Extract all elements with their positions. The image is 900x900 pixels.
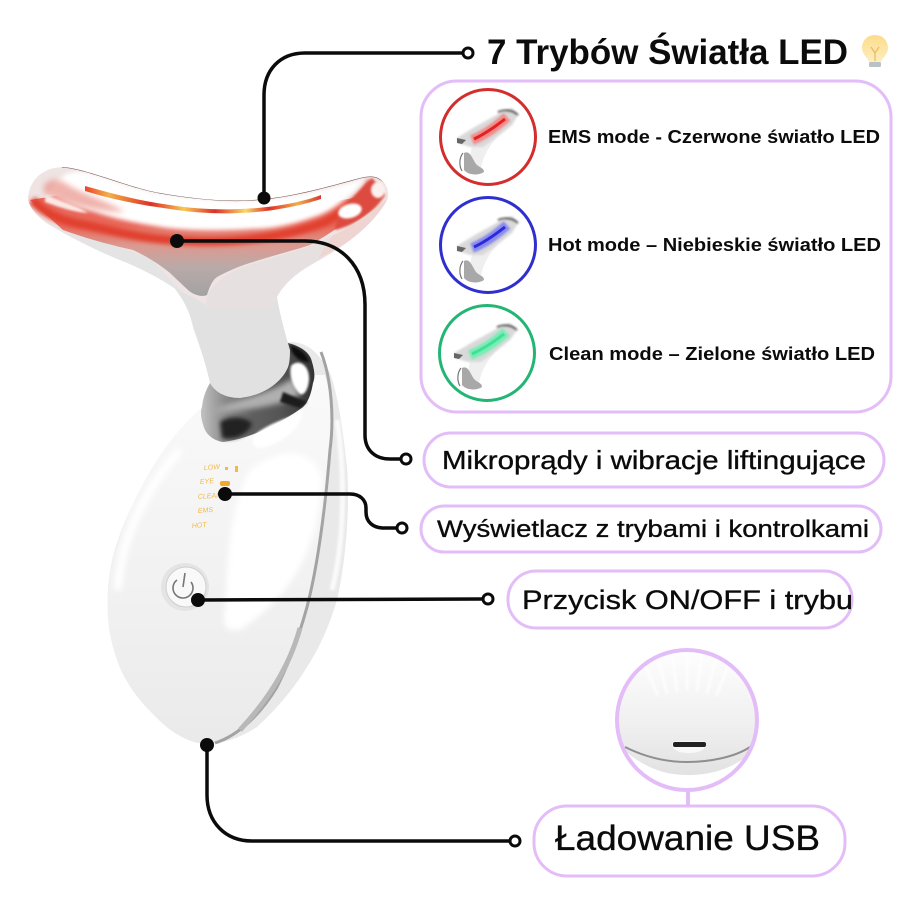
device head (28, 167, 388, 306)
icon: blue mode device (440, 198, 536, 292)
device body (108, 342, 348, 744)
display indicators: EYE (200, 478, 214, 486)
line: power button (198, 599, 482, 600)
display indicators: LOW (204, 464, 221, 472)
line: LED modes (264, 53, 462, 198)
right lower rim (318, 198, 388, 258)
label: Clean mode: Clean mode – Zielone światło LED (549, 344, 875, 364)
display indicators: CLEAN (198, 492, 222, 501)
line: microcurrents (177, 241, 400, 459)
label: EMS mode: EMS mode - Czerwone światło LED (548, 127, 880, 147)
collar shading (212, 378, 300, 412)
LED strip (85, 186, 321, 213)
line: USB (207, 745, 509, 841)
ring (617, 650, 757, 790)
top edge (62, 167, 388, 201)
display indicators (192, 464, 238, 530)
anchor dots (170, 192, 270, 752)
right tip glow (335, 178, 385, 230)
neck (170, 245, 330, 398)
display indicators: EMS (198, 507, 214, 515)
end rings (397, 48, 520, 846)
right tip reflections (337, 201, 363, 221)
device: neck massager (20, 160, 400, 744)
title: 7 Trybów Światła LED (487, 32, 848, 72)
underside glow (30, 195, 372, 296)
icon: light bulb (862, 35, 888, 67)
left lower rim (45, 222, 185, 295)
pill: USB charging (534, 806, 845, 876)
left highlight bar (45, 196, 88, 213)
neck overlap (206, 238, 330, 310)
label: Hot mode: Hot mode – Niebieskie światło LED (548, 235, 881, 255)
line: display (225, 494, 396, 528)
front glare (224, 453, 322, 630)
label: Mikroprądy i wibracje liftingujące (442, 445, 866, 475)
icon: red mode device (440, 90, 536, 184)
label: Ładowanie USB (555, 819, 820, 858)
USB close-up (619, 687, 755, 775)
display indicators: HOT (192, 522, 208, 530)
pill: microcurrents (424, 433, 884, 487)
chrome collar (201, 343, 314, 448)
label: Przycisk ON/OFF i trybu (522, 585, 853, 615)
red band (32, 182, 372, 241)
mode: red (440, 90, 880, 184)
back shell glare (332, 420, 342, 590)
panel: LED modes (421, 81, 891, 412)
pill: power button (508, 571, 853, 628)
connector lines (177, 53, 509, 841)
silver seam (215, 352, 332, 743)
left tip pink shade (44, 180, 125, 212)
callout: USB port (610, 645, 764, 806)
head base (28, 167, 388, 306)
power button (161, 563, 209, 611)
pill: display (421, 506, 881, 552)
mode: green (440, 306, 875, 400)
icon: green mode device (440, 306, 534, 400)
bright face (48, 172, 366, 230)
mode: blue (440, 198, 881, 292)
connector stem (686, 790, 690, 806)
label: Wyświetlacz z trybami i kontrolkami (437, 516, 869, 543)
